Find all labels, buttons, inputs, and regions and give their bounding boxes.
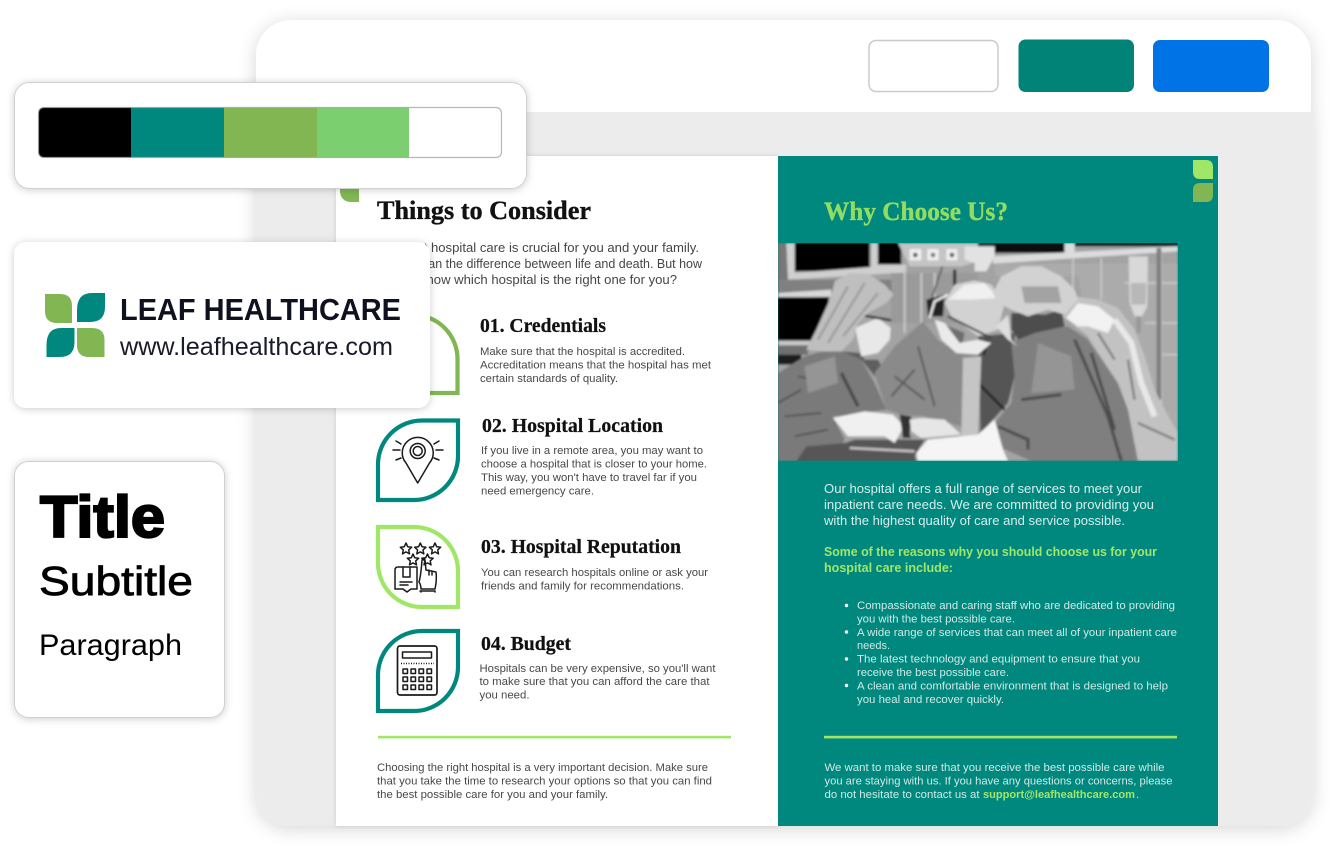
bold reasons lead-in: hospital care include: xyxy=(824,560,953,575)
bullet list: The latest technology and equipment to ensure that you xyxy=(857,654,1140,666)
body 03: friends and family for recommendations. xyxy=(481,580,684,592)
body 04: to make sure that you can afford the care that xyxy=(480,676,710,688)
intro paragraph right xyxy=(823,481,1154,528)
sample subtitle: Subtitle xyxy=(39,558,193,604)
body 04: Hospitals can be very expensive, so you'll want xyxy=(480,663,716,675)
body 02: If you live in a remote area, you may want to xyxy=(481,445,703,457)
website: www.leafhealthcare.com xyxy=(119,333,393,361)
item 01: credentials xyxy=(379,315,711,393)
item 04: budget xyxy=(378,631,716,711)
bold reasons lead-in: Some of the reasons why you should choose us for your xyxy=(824,544,1157,559)
body 01 xyxy=(480,346,711,385)
heading: things to consider: Things to Consider xyxy=(377,196,591,225)
middle figure gown xyxy=(875,321,981,440)
item 03: hospital reputation xyxy=(378,527,708,607)
heading 03: 03. Hospital Reputation xyxy=(481,536,681,558)
card: logo xyxy=(14,242,430,408)
brand name: LEAF HEALTHCARE xyxy=(120,292,401,327)
closing paragraph left: the best possible care for you and your family. xyxy=(377,789,608,801)
bullet list: receive the best possible care. xyxy=(857,667,1009,679)
closing paragraph left xyxy=(377,762,712,801)
browser window xyxy=(256,20,1313,826)
icon: rating stars and hand xyxy=(395,543,441,592)
bullet list: A clean and comfortable environment that is designed to help xyxy=(857,680,1168,692)
sample paragraph: Paragraph xyxy=(39,629,182,662)
intro paragraph right: Our hospital offers a full range of services to meet your xyxy=(824,481,1143,496)
backdrop and walls xyxy=(778,243,1178,461)
intro paragraph: It can mean the difference between life and death. But how xyxy=(377,256,703,271)
icon frame 04 xyxy=(378,631,458,711)
corner leaves right xyxy=(1193,160,1213,202)
body 04 xyxy=(480,663,716,702)
heading 02: 02. Hospital Location xyxy=(482,415,663,437)
heading 01: 01. Credentials xyxy=(480,315,606,337)
body 02 xyxy=(481,445,707,498)
logo mark xyxy=(45,293,105,357)
intro paragraph: Inpatient hospital care is crucial for you and your family. xyxy=(377,240,699,255)
body 02: choose a hospital that is closer to your home. xyxy=(481,458,707,470)
closing paragraph right: . xyxy=(1136,789,1139,801)
body 01: Make sure that the hospital is accredited. xyxy=(480,346,685,358)
card: typography xyxy=(14,462,224,718)
card: colour palette xyxy=(14,82,526,188)
bullet list: you with the best possible care. xyxy=(857,614,1015,626)
left face and mask xyxy=(841,351,885,376)
left hair cap xyxy=(806,273,894,351)
blue button xyxy=(1153,40,1269,92)
closing paragraph right: support@leafhealthcare.com xyxy=(983,789,1135,801)
body 03: You can research hospitals online or ask your xyxy=(481,567,708,579)
photo: surgeons in operating room xyxy=(778,243,1178,461)
intro paragraph: do you know which hospital is the right one for you? xyxy=(377,272,677,287)
document right page xyxy=(778,156,1218,826)
bold reasons lead-in xyxy=(824,544,1157,575)
bullet list: needs. xyxy=(857,640,890,652)
heading 04: 04. Budget xyxy=(481,633,571,655)
bullet list: A wide range of services that can meet all of your inpatient care xyxy=(857,627,1177,639)
right figure xyxy=(995,326,1138,461)
centre low dark zone xyxy=(978,333,1015,436)
closing paragraph right: We want to make sure that you receive the best possible care while xyxy=(824,762,1164,774)
palette swatches xyxy=(38,108,502,158)
bullet list: you heal and recover quickly. xyxy=(857,694,1004,706)
icon frame 03 xyxy=(378,527,458,607)
back figure xyxy=(1063,296,1178,461)
body 03 xyxy=(481,567,708,592)
body 04: you need. xyxy=(480,690,530,702)
icon: calculator xyxy=(398,646,437,695)
intro paragraph right: with the highest quality of care and service possible. xyxy=(823,513,1125,528)
closing paragraph left: that you take the time to research your options so that you can find xyxy=(377,776,712,788)
intro paragraph right: inpatient care needs. We are committed to providing you xyxy=(824,497,1154,512)
body 01: certain standards of quality. xyxy=(480,373,618,385)
icon: location pin xyxy=(393,437,443,483)
closing paragraph right: you are staying with us. If you have any questions or concerns, please xyxy=(824,776,1172,788)
body 02: This way, you won't have to travel far if you xyxy=(481,472,697,484)
document left page xyxy=(336,156,778,826)
item 02: hospital location xyxy=(378,415,707,500)
teal button xyxy=(1018,40,1134,92)
left figure gown xyxy=(778,351,886,461)
bullet list xyxy=(845,600,1177,706)
sample title: Title xyxy=(40,485,165,550)
gloves and table xyxy=(796,440,925,461)
middle face and cap xyxy=(947,325,965,344)
outline button xyxy=(869,40,998,92)
body 02: need emergency care. xyxy=(481,486,594,498)
closing paragraph right: do not hesitate to contact us at xyxy=(824,789,980,801)
bullet list: Compassionate and caring staff who are dedicated to providing xyxy=(857,600,1175,612)
heading: why choose us: Why Choose Us? xyxy=(824,197,1008,226)
window header bar xyxy=(256,20,1311,112)
closing paragraph right xyxy=(824,762,1172,801)
corner leaf left xyxy=(340,180,359,202)
closing paragraph left: Choosing the right hospital is a very important decision. Make sure xyxy=(377,762,708,774)
intro paragraph xyxy=(377,240,703,287)
icon frame 01 xyxy=(379,315,458,393)
body 01: Accreditation means that the hospital has met xyxy=(480,360,711,372)
icon frame 02 xyxy=(378,420,458,500)
